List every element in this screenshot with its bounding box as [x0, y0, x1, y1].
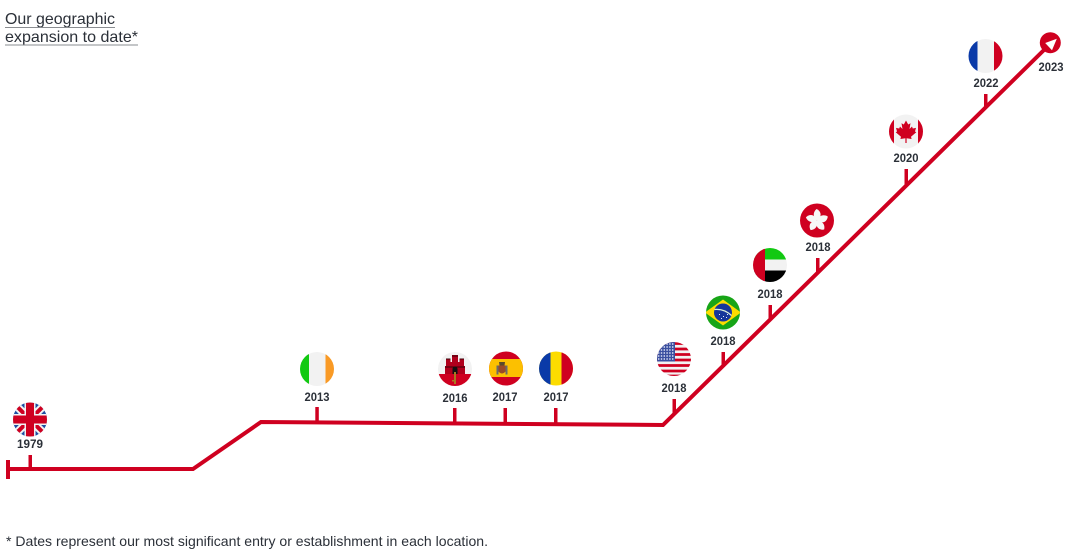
title: Our geographic: [5, 11, 115, 28]
flag: Hong Kong: [800, 204, 834, 238]
label: 2023: 2023: [1038, 60, 1064, 74]
title: [5, 11, 138, 46]
flag: Canada: [889, 114, 923, 148]
label: 2016: 2016: [442, 391, 468, 405]
flag: United Kingdom: [13, 402, 47, 436]
label: 2018 Hong Kong: 2018: [806, 240, 831, 254]
label: 2017 Spain: 2017: [492, 390, 518, 404]
flag: Gibraltar: [438, 352, 472, 386]
milestone ticks: [28, 94, 988, 469]
label: 2013: 2013: [304, 390, 330, 404]
end marker 2023: [1040, 32, 1061, 53]
flag: Spain: [489, 352, 523, 386]
label: 2020: 2020: [894, 151, 919, 165]
flag: Brazil: [705, 296, 741, 330]
timeline line: [6, 48, 1046, 479]
label: 2018 USA: 2018: [662, 381, 687, 395]
label: 1979: 1979: [17, 437, 43, 451]
label: 2018 UAE: 2018: [758, 287, 783, 301]
label: 2022: 2022: [974, 76, 999, 90]
flag: United Arab Emirates: [753, 248, 787, 282]
label: 2018 Brazil: 2018: [710, 334, 736, 348]
flag: France: [968, 39, 1003, 73]
flag: United States: [657, 342, 691, 376]
footnote: * Dates represent our most significant entry or establishment in each location.: [6, 533, 488, 549]
label: 2017 Romania: 2017: [544, 390, 569, 404]
flag: Romania: [539, 352, 573, 386]
title: expansion to date*: [5, 29, 138, 46]
flag: Ireland: [300, 352, 334, 386]
